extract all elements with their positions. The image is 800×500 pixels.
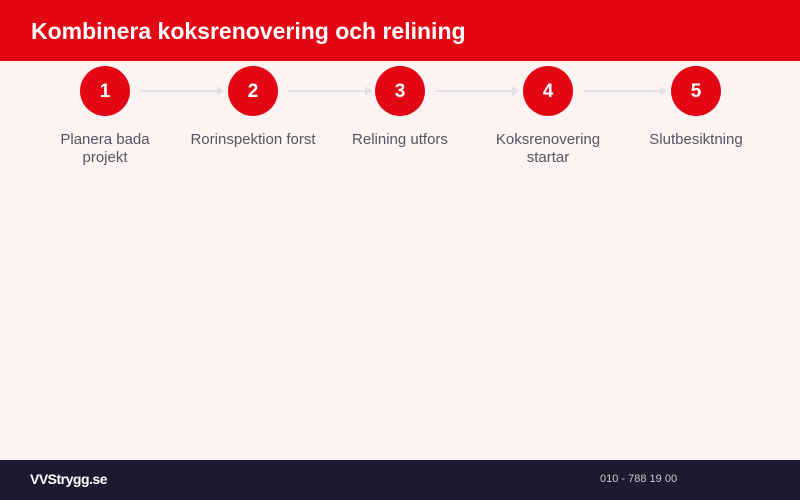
step 4 label: Koksrenovering [496,131,600,148]
step 2 circle [228,66,278,116]
header [0,0,800,61]
step 3 circle: 3 [395,81,405,102]
arrow 2 [288,90,368,92]
step 5 circle [671,66,721,116]
step 4 label: startar [527,149,569,166]
title: Kombinera koksrenovering och relining [31,18,466,44]
step 5 circle: 5 [691,81,701,102]
step 4 circle: 4 [543,81,553,102]
step 2 label: Rorinspektion forst [190,131,316,148]
step 3 circle [375,66,425,116]
brand: VVStrygg.se [30,471,107,487]
step 4 label [496,131,600,166]
step 4 circle [523,66,573,116]
step 1 label: Planera bada [60,131,150,148]
arrow 3 [435,90,515,92]
step 1 circle [80,66,130,116]
arrow 4 [583,90,663,92]
footer [0,460,800,500]
step 1 circle: 1 [100,81,110,102]
step 1 label: projekt [82,149,128,166]
step 5 label: Slutbesiktning [649,131,743,148]
step 3 label: Relining utfors [352,131,448,148]
phone: 010 - 788 19 00 [600,473,677,485]
arrow 1 [140,90,220,92]
step 1 label [60,131,150,166]
step 2 circle: 2 [248,81,258,102]
